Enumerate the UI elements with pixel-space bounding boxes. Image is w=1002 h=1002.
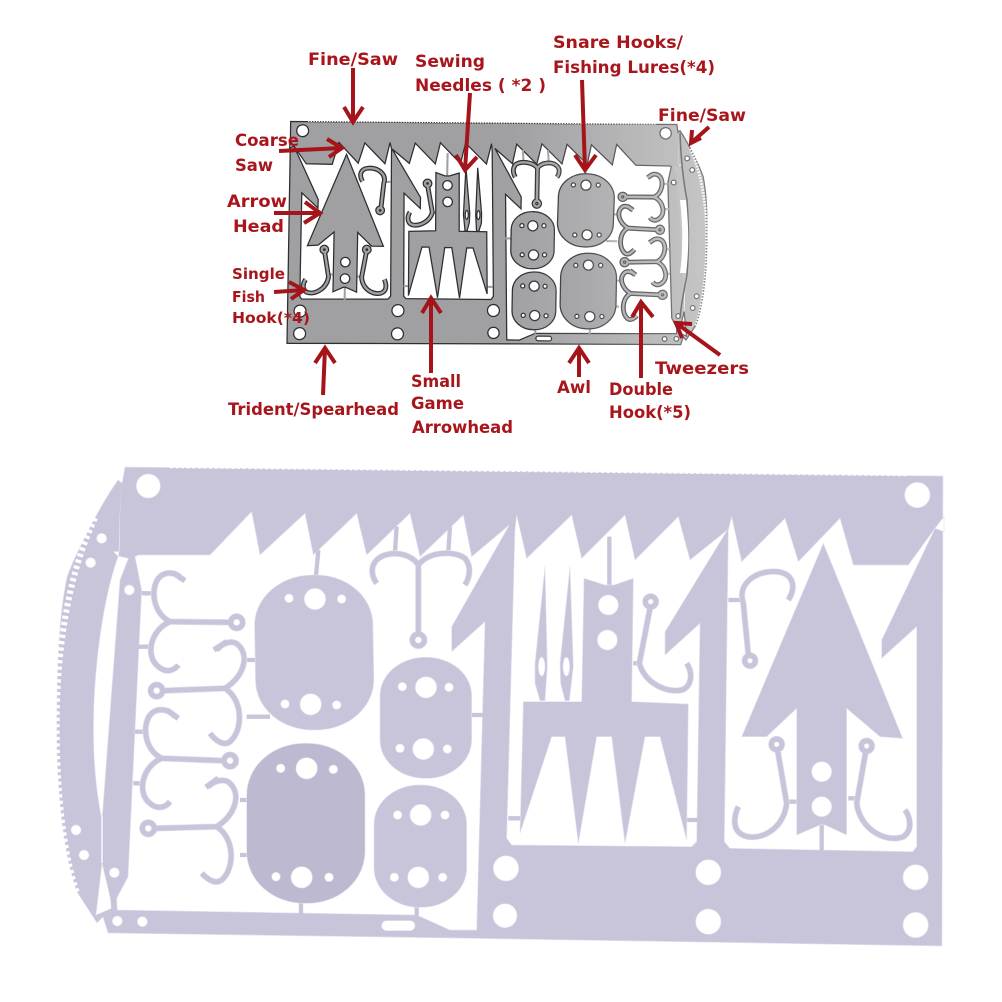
label: arrow head <box>227 192 287 237</box>
cut-out window with coarse saw <box>117 512 509 930</box>
label: sewing needles <box>415 52 546 96</box>
single fish hooks <box>639 572 910 838</box>
label: tweezers: Tweezers <box>655 359 749 379</box>
label: arrow head: Head <box>233 217 284 237</box>
small game arrowhead <box>520 578 688 843</box>
large card photo: survival multi-tool <box>57 466 944 946</box>
lower wedge cut-out <box>96 863 112 915</box>
label: arrow head: Arrow <box>227 192 287 212</box>
label: coarse saw <box>235 131 299 176</box>
label: double hook: Double <box>609 380 673 400</box>
label: snare hooks: Fishing Lures(*4) <box>553 58 715 78</box>
annotation arrows <box>274 68 720 395</box>
right window with coarse saw <box>724 517 935 852</box>
mirrored card <box>286 117 709 351</box>
arrow: coarse saw <box>279 139 342 157</box>
label: double hook: Hook(*5) <box>609 403 691 423</box>
label: fine saw right: Fine/Saw <box>658 106 746 126</box>
lure plate 4 <box>374 785 467 907</box>
arrow: sewing needles <box>456 93 477 170</box>
label: single fish hook: Fish <box>232 288 265 306</box>
sewing needle 1 <box>535 567 547 701</box>
arrow: single fish hook <box>274 282 304 299</box>
slit beside top-left block <box>113 483 121 557</box>
tweezer outline <box>680 133 688 318</box>
card silhouette <box>57 467 943 946</box>
arrow: trident <box>315 348 335 395</box>
edge notch <box>935 517 944 532</box>
connecting tabs <box>113 527 485 916</box>
lure plate 3 <box>247 743 365 903</box>
label: single fish hook: Hook(*4) <box>232 309 310 327</box>
top fine saw teeth <box>170 466 906 474</box>
label: snare hooks: Snare Hooks/ <box>553 33 684 53</box>
thin slit next to tweezers <box>100 817 104 863</box>
arrow: double hook <box>632 302 653 378</box>
lure plate 2 <box>380 657 472 778</box>
label: double hook <box>609 380 691 423</box>
label: single fish hook <box>232 265 310 327</box>
label: small game arrowhead: Small <box>411 372 461 392</box>
sewing needle 2 <box>560 567 573 701</box>
label: fine saw: Fine/Saw <box>308 50 398 70</box>
blade and tweezer holes <box>71 533 147 927</box>
arrow: fine saw right <box>691 127 709 143</box>
label: single fish hook: Single <box>232 265 285 283</box>
label: sewing needles: Sewing <box>415 52 485 72</box>
centre window with coarse saw <box>507 515 727 847</box>
arrow: snare hooks <box>575 80 596 170</box>
connecting tabs <box>508 537 857 852</box>
crescent cut-out <box>93 556 128 820</box>
arrow: awl <box>569 348 589 377</box>
label: small game arrowhead <box>411 372 513 438</box>
highlight across right of card <box>510 112 720 352</box>
label: sewing needles: Needles ( *2 ) <box>415 76 546 96</box>
label: awl: Awl <box>557 378 591 398</box>
small annotated card photo <box>286 112 720 352</box>
label: coarse saw: Saw <box>235 156 273 176</box>
left section of card <box>71 474 509 931</box>
arrow: small game arrowhead <box>422 298 441 373</box>
curved fine saw teeth <box>57 518 95 893</box>
card holes <box>493 482 930 938</box>
lure plate 1 <box>254 574 375 731</box>
arrow: arrow head <box>274 202 320 223</box>
label: snare hooks <box>553 33 715 78</box>
corner hole <box>136 474 160 498</box>
label: small game arrowhead: Game <box>411 394 464 414</box>
arrow: tweezers <box>676 323 720 355</box>
arrow: fine saw top <box>344 68 363 122</box>
double hooks and trident hook <box>142 553 469 882</box>
label: coarse saw: Coarse <box>235 131 299 151</box>
annotation labels <box>227 33 749 438</box>
closed crescent of the tweezers <box>672 167 691 291</box>
awl slot <box>382 921 415 931</box>
tweezer slot <box>680 200 688 273</box>
label: trident: Trident/Spearhead <box>228 400 399 420</box>
large arrowhead <box>742 543 903 835</box>
right section of card <box>493 482 944 938</box>
label: small game arrowhead: Arrowhead <box>412 418 513 438</box>
